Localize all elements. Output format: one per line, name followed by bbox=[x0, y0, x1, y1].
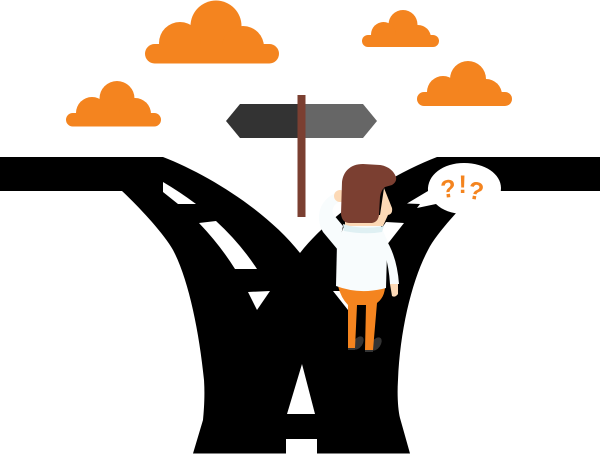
cloud: small left bbox=[66, 81, 161, 130]
post bbox=[298, 95, 306, 217]
forked road bbox=[0, 157, 600, 454]
trousers bbox=[338, 286, 385, 350]
collar bbox=[343, 224, 384, 233]
sign: left arrow bbox=[226, 104, 298, 138]
right arm bbox=[385, 238, 399, 284]
neck and face bbox=[345, 188, 392, 226]
road marking: right triangle bbox=[333, 291, 355, 310]
right hand bbox=[390, 284, 398, 297]
road marking: left lower dash bbox=[199, 221, 257, 269]
person seen from behind bbox=[319, 164, 399, 353]
speech bubble bbox=[407, 163, 501, 214]
road marking: left upper dash bbox=[163, 182, 196, 204]
question text: ?!? bbox=[439, 171, 486, 207]
raised arm bbox=[319, 193, 343, 250]
cloud: large top centre bbox=[145, 0, 279, 68]
road marking: right dash bbox=[360, 222, 404, 260]
shoes bbox=[348, 334, 384, 353]
road marking: left triangle bbox=[248, 291, 270, 310]
signpost bbox=[226, 95, 377, 217]
hair bbox=[341, 164, 396, 223]
bubble shape bbox=[407, 163, 501, 214]
shirt bbox=[336, 224, 387, 291]
road marking: centre arrow bbox=[287, 364, 315, 414]
hand on head bbox=[334, 190, 346, 202]
cloud: small top right bbox=[362, 10, 439, 51]
cloud: medium right bbox=[417, 61, 512, 111]
sign: right arrow bbox=[305, 104, 377, 138]
